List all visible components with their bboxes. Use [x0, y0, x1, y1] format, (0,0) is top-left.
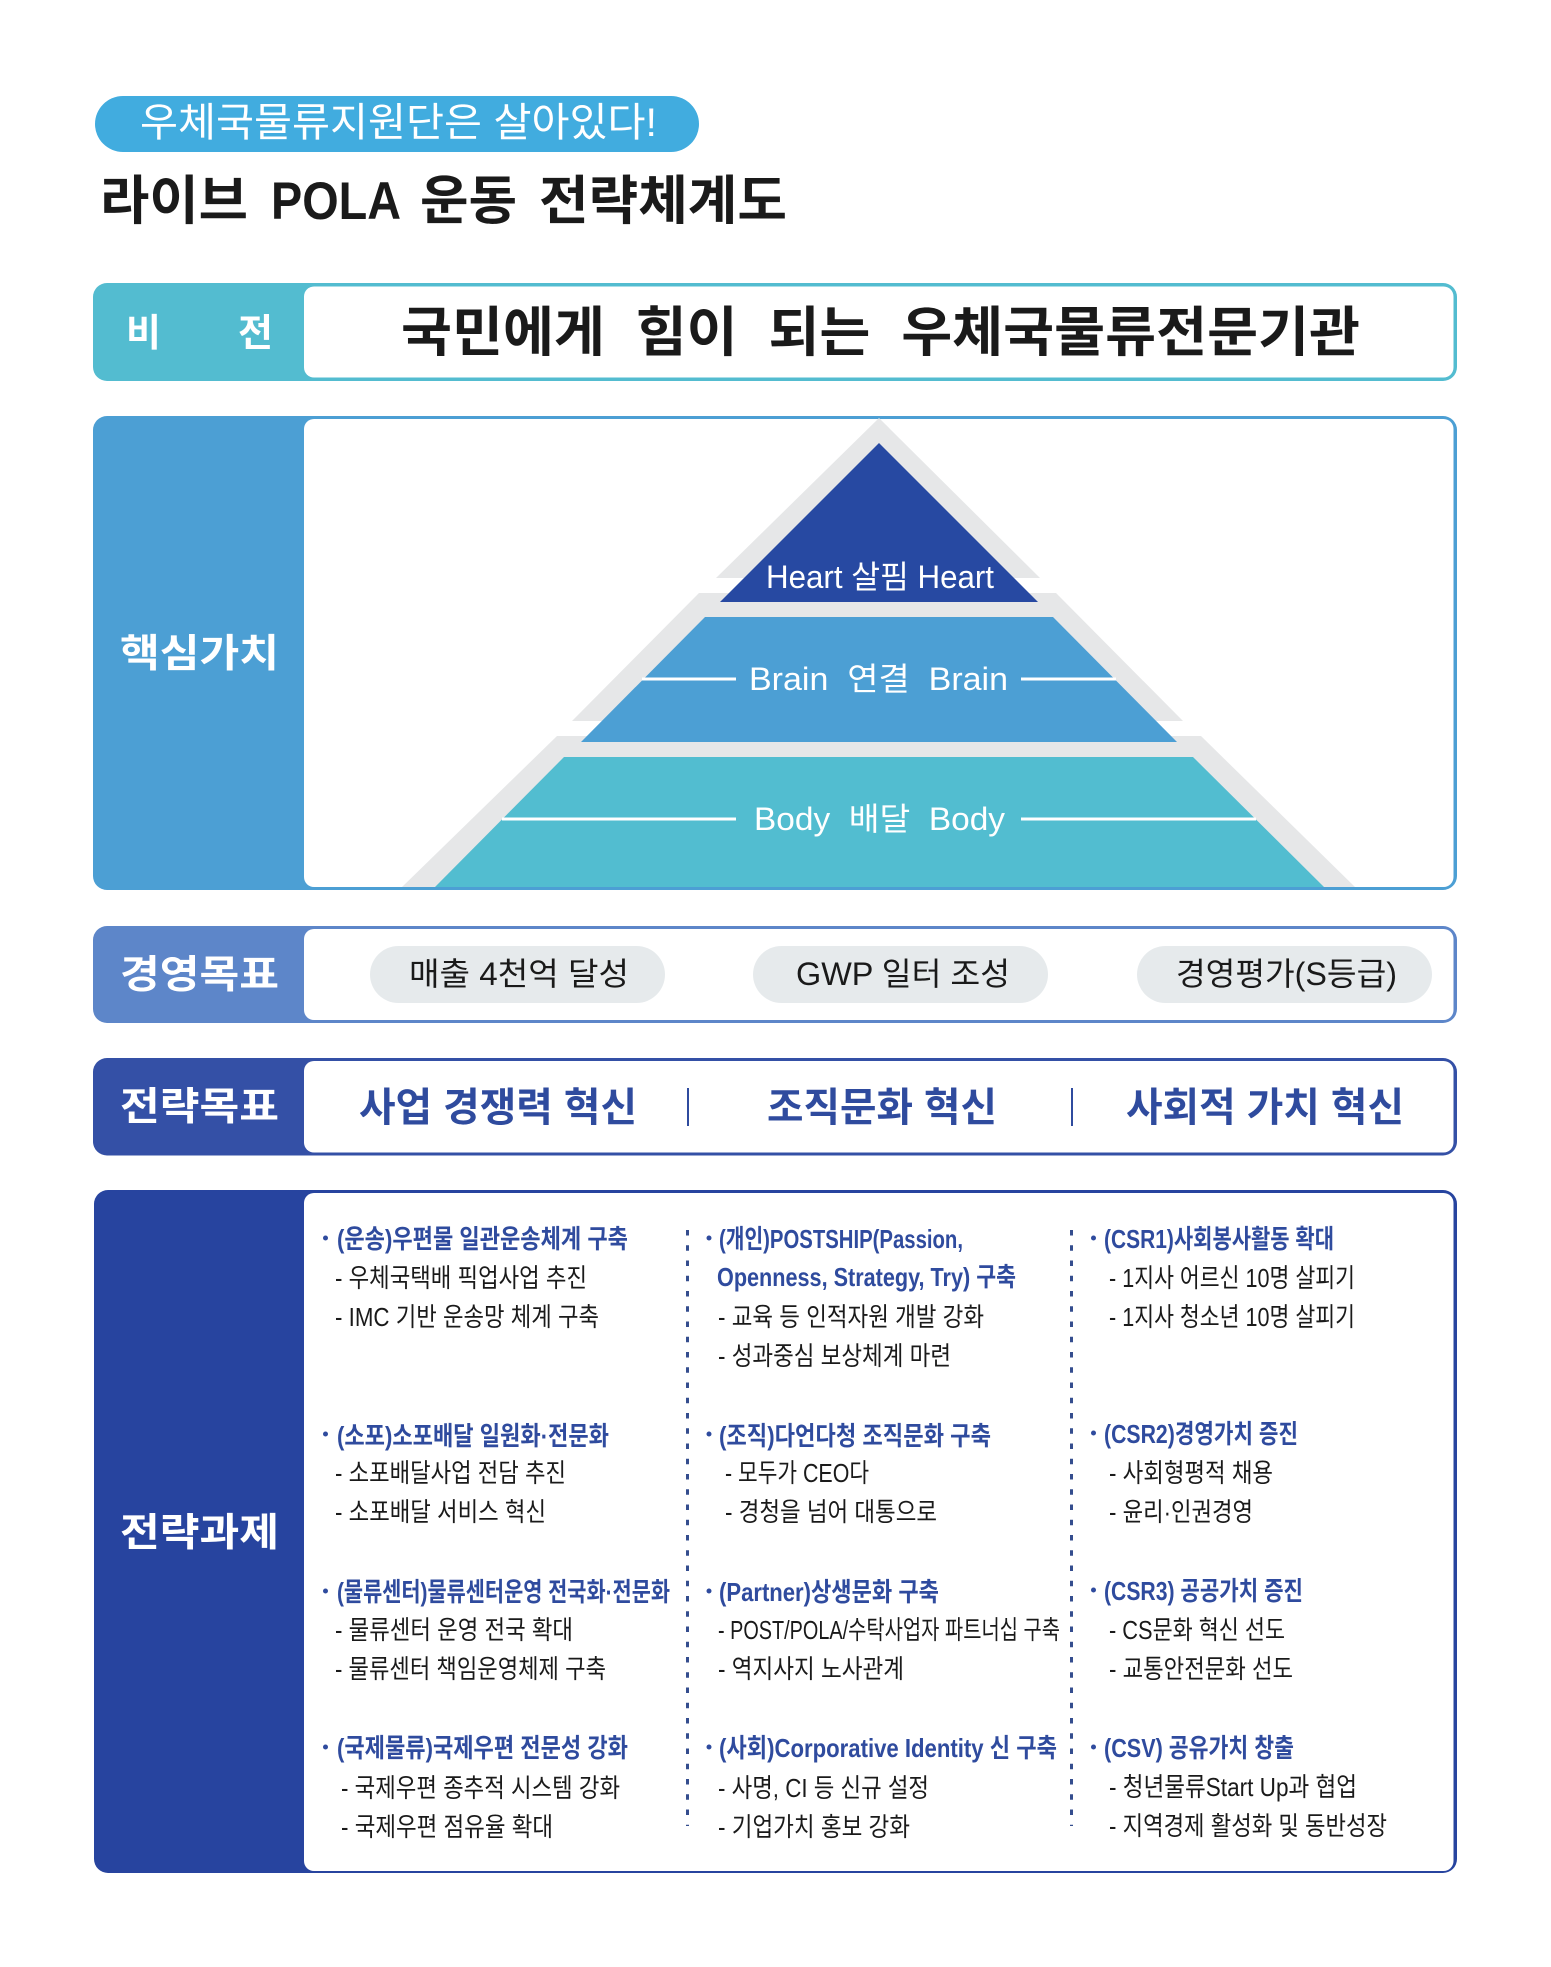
task: corporate identity: - 사명, CI 등 신규 설정 — [718, 1773, 929, 1803]
goal pill: GWP — [753, 946, 1048, 1003]
pyramid tier: heart: Heart 살핌 Heart — [766, 559, 994, 595]
title: 운동 — [420, 172, 517, 231]
pyramid chart — [402, 418, 1355, 887]
task: CSR3 — [1091, 1576, 1303, 1684]
task: individual POSTSHIP — [706, 1224, 1016, 1371]
task: CSV — [1091, 1733, 1387, 1841]
task: partner culture: - 역지사지 노사관계 — [718, 1654, 904, 1684]
task: individual POSTSHIP: - 교육 등 인적자원 개발 강화 — [718, 1302, 984, 1332]
vision statement: 국민에게 힘이 되는 우체국물류전문기관 — [401, 303, 1360, 363]
task: small parcels: - 소포배달 서비스 혁신 — [335, 1497, 546, 1527]
panel: strategic goals — [93, 1058, 1457, 1156]
task: CSR1: (CSR1)사회봉사활동 확대 — [1104, 1224, 1334, 1254]
task column 3 — [1091, 1224, 1387, 1841]
task: organization culture — [706, 1421, 991, 1527]
task: CSR3: - 교통안전문화 선도 — [1109, 1654, 1293, 1684]
task: logistics center: - 물류센터 운영 전국 확대 — [335, 1615, 573, 1645]
panel: vision — [93, 283, 1457, 381]
strategic goal: social value: 사회적 가치 혁신 — [1126, 1086, 1404, 1130]
panel: strategic tasks — [94, 1190, 1457, 1873]
title: 라이브 — [100, 172, 248, 231]
task: international logistics: (국제물류)국제우편 전문성 강화 — [337, 1733, 628, 1763]
strategic tasks label: 전략과제 — [120, 1512, 279, 1555]
panel: core values — [93, 416, 1457, 890]
management goals label: 경영목표 — [120, 954, 279, 997]
task: CSR1 — [1091, 1224, 1355, 1332]
strategic goal: culture: 조직문화 혁신 — [767, 1086, 997, 1130]
strategic goals label: 전략목표 — [120, 1086, 279, 1129]
task: logistics center — [323, 1577, 670, 1684]
core values label: 핵심가치 — [120, 633, 279, 676]
task: parcel transport — [323, 1224, 628, 1332]
pyramid tier: body — [435, 757, 1324, 887]
task: CSV: - 지역경제 활성화 및 동반성장 — [1109, 1811, 1387, 1841]
task: corporate identity: (사회)Corporative Identity 신 구축 — [719, 1733, 1057, 1763]
goal pill: revenue: 매출 4천억 달성 — [409, 956, 629, 992]
pyramid tier: heart — [720, 443, 1038, 602]
task: CSR3: (CSR3) 공공가치 증진 — [1104, 1576, 1303, 1606]
title: POLA — [271, 172, 401, 231]
vision label: 비 전 — [126, 313, 273, 355]
task: individual POSTSHIP: (개인)POSTSHIP(Passion, — [719, 1224, 963, 1254]
task: CSR2: - 사회형평적 채용 — [1109, 1458, 1273, 1488]
task: corporate identity: - 기업가치 홍보 강화 — [718, 1812, 910, 1842]
task: small parcels: (소포)소포배달 일원화·전문화 — [337, 1421, 609, 1451]
task: partner culture — [706, 1577, 1060, 1684]
task: CSR1: - 1지사 어르신 10명 살피기 — [1109, 1263, 1355, 1293]
task: partner culture: (Partner)상생문화 구축 — [719, 1577, 939, 1607]
task: small parcels: - 소포배달사업 전담 추진 — [335, 1458, 566, 1488]
task column 1 — [323, 1224, 670, 1842]
panel: management goals — [93, 926, 1457, 1023]
task: international logistics — [323, 1733, 628, 1842]
task: small parcels — [323, 1421, 609, 1527]
task: parcel transport: - 우체국택배 픽업사업 추진 — [335, 1263, 587, 1293]
subtitle pill — [95, 96, 699, 152]
task: parcel transport: (운송)우편물 일관운송체계 구축 — [337, 1224, 628, 1254]
task: CSR1: - 1지사 청소년 10명 살피기 — [1109, 1302, 1355, 1332]
task: CSR2: (CSR2)경영가치 증진 — [1104, 1419, 1298, 1449]
subtitle pill: 우체국물류지원단은 살아있다! — [140, 101, 657, 145]
task: organization culture: - 경청을 넘어 대통으로 — [725, 1497, 937, 1527]
task: international logistics: - 국제우편 종추적 시스템 강화 — [341, 1773, 620, 1803]
task: individual POSTSHIP: Openness, Strategy, Try) 구축 — [717, 1262, 1016, 1292]
goal pill: revenue — [370, 946, 665, 1003]
title: 전략체계도 — [539, 172, 787, 231]
task: CSR2: - 윤리·인권경영 — [1109, 1497, 1253, 1527]
task: CSV: (CSV) 공유가치 창출 — [1104, 1733, 1294, 1763]
task: international logistics: - 국제우편 점유율 확대 — [341, 1812, 553, 1842]
task: logistics center: (물류센터)물류센터운영 전국화·전문화 — [337, 1577, 670, 1607]
goal pill: GWP: GWP 일터 조성 — [796, 956, 1010, 992]
task: individual POSTSHIP: - 성과중심 보상체계 마련 — [718, 1341, 951, 1371]
task: CSR3: - CS문화 혁신 선도 — [1109, 1615, 1285, 1645]
task column 2 — [706, 1224, 1060, 1842]
task: logistics center: - 물류센터 책임운영체제 구축 — [335, 1654, 606, 1684]
task: partner culture: - POST/POLA/수탁사업자 파트너십 구축 — [718, 1615, 1060, 1645]
goal pill: evaluation: 경영평가(S등급) — [1176, 956, 1397, 992]
task: CSV: - 청년물류Start Up과 협업 — [1109, 1772, 1357, 1802]
strategic goal: business: 사업 경쟁력 혁신 — [359, 1086, 637, 1130]
pyramid tier: brain: Brain 연결 Brain — [749, 661, 1008, 697]
task: organization culture: (조직)다언다청 조직문화 구축 — [719, 1421, 991, 1451]
task: parcel transport: - IMC 기반 운송망 체계 구축 — [335, 1302, 599, 1332]
goal pill: evaluation — [1137, 946, 1432, 1003]
task: CSR2 — [1091, 1419, 1298, 1527]
pyramid tier: brain — [581, 617, 1177, 742]
pyramid tier: body: Body 배달 Body — [754, 801, 1005, 837]
task: organization culture: - 모두가 CEO다 — [725, 1458, 869, 1488]
task: corporate identity — [706, 1733, 1057, 1842]
